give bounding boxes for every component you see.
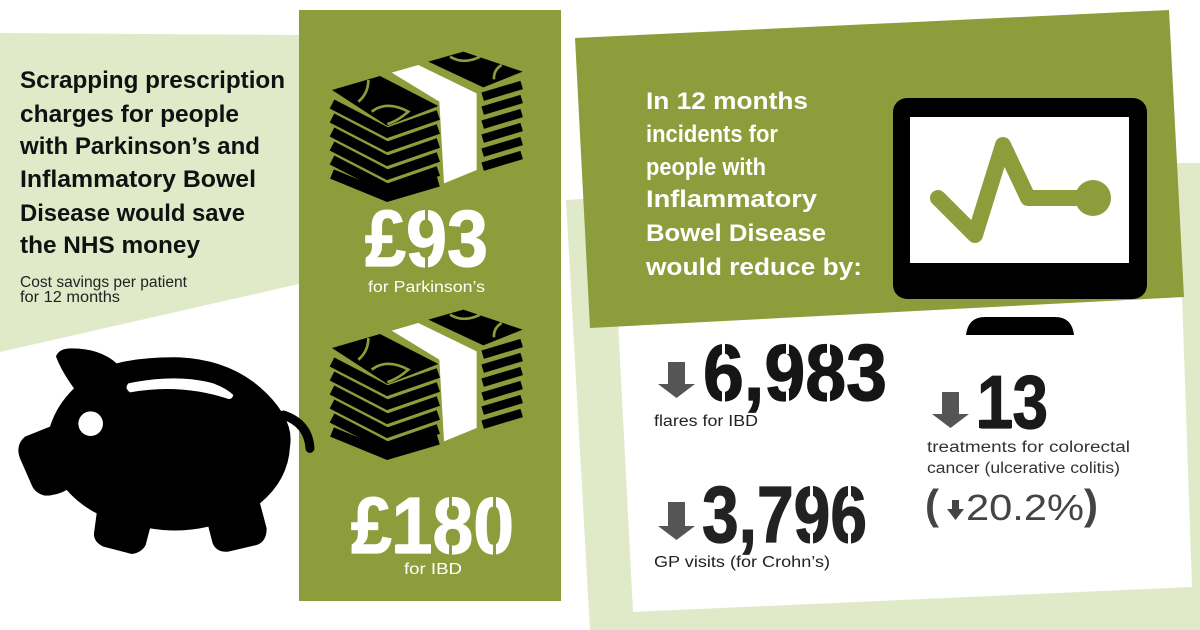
icon: stack of banknotes, Parkinson's: [332, 52, 523, 197]
panel: right light green background: [566, 163, 1200, 630]
heading: incidents reduction: [645, 88, 862, 281]
stat: 20.2% reduction: (: [925, 481, 939, 528]
stat: 20.2% reduction: 20.2%: [966, 487, 1084, 528]
icon: monitor with pulse line: [893, 98, 1147, 335]
heading: incidents reduction: people with: [646, 154, 766, 181]
panel: white results area: [618, 295, 1192, 612]
stat: 13 treatments: treatments for colorectal: [927, 439, 1130, 456]
heading: incidents reduction: incidents for: [646, 121, 778, 148]
icon: piggy bank: [18, 348, 310, 554]
stat: 3,796 GP visits: [654, 470, 867, 571]
stat: 20.2% reduction: [925, 481, 1098, 528]
stat: 6,983 flares: 6,983: [703, 328, 887, 417]
heading: prescription charges: Inflammatory Bowel: [20, 166, 256, 193]
panel: olive money column: [299, 10, 561, 601]
figure: £93: £93: [365, 194, 488, 283]
heading: incidents reduction: Bowel Disease: [646, 220, 826, 247]
text: cost savings note: for 12 months: [20, 289, 120, 306]
stat: 6,983 flares: flares for IBD: [654, 413, 758, 430]
stat: 3,796 GP visits: GP visits (for Crohn’s): [654, 554, 830, 571]
icon: stack of banknotes, IBD: [332, 310, 523, 455]
stat: 13 treatments: 13: [977, 360, 1048, 444]
stat: 13 treatments: cancer (ulcerative colitis): [927, 460, 1120, 477]
panel: olive incidents header: [575, 10, 1184, 328]
stat: 13 treatments: [927, 360, 1130, 477]
stat: 3,796 GP visits: 3,796: [702, 470, 867, 559]
heading: prescription charges: charges for people: [20, 101, 239, 128]
stat: 20.2% reduction: ): [1084, 481, 1098, 528]
heading: prescription charges: with Parkinson’s and: [19, 133, 260, 160]
text: cost savings note: [20, 274, 188, 306]
heading: prescription charges: the NHS money: [20, 232, 201, 259]
heading: prescription charges: Scrapping prescription: [20, 67, 285, 94]
heading: incidents reduction: would reduce by:: [645, 254, 862, 281]
panel: left light green background: [0, 33, 299, 352]
heading: prescription charges: Disease would save: [20, 200, 245, 227]
label: for Parkinson's: for Parkinson’s: [368, 279, 485, 296]
heading: prescription charges: [19, 67, 285, 259]
label: for IBD: for IBD: [404, 561, 462, 578]
text: cost savings note: Cost savings per patient: [20, 274, 188, 291]
heading: incidents reduction: In 12 months: [646, 88, 808, 115]
heading: incidents reduction: Inflammatory: [646, 186, 818, 213]
figure: £180: £180: [351, 481, 514, 570]
stat: 6,983 flares: [654, 328, 887, 430]
